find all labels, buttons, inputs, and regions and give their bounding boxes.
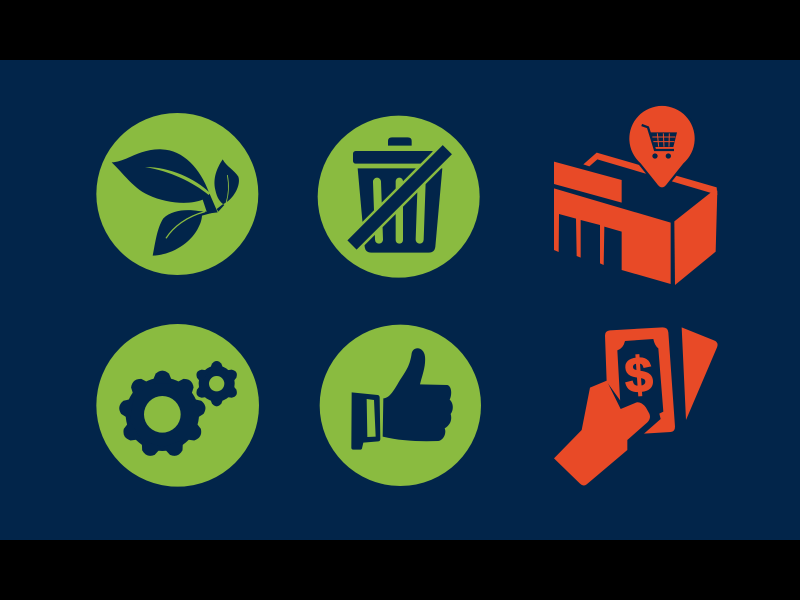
back card <box>682 327 718 420</box>
icon: thumbs up in green circle <box>320 325 481 486</box>
icon: leaves in green circle <box>96 113 258 275</box>
store roof outline <box>583 153 717 195</box>
store side wall <box>674 191 717 285</box>
hand <box>554 381 650 486</box>
dollar sign: $ <box>623 346 655 404</box>
store front <box>554 188 671 284</box>
location pin <box>629 106 695 187</box>
icon: gears in green circle <box>96 324 259 487</box>
icon: store with shopping cart pin <box>554 106 717 285</box>
bill inner panel <box>617 339 663 434</box>
store sign <box>554 162 622 203</box>
icon: hand holding money <box>554 327 718 486</box>
shopping cart <box>642 125 677 159</box>
bill <box>605 327 675 434</box>
icon: crossed-out trash can in green circle <box>318 116 480 278</box>
